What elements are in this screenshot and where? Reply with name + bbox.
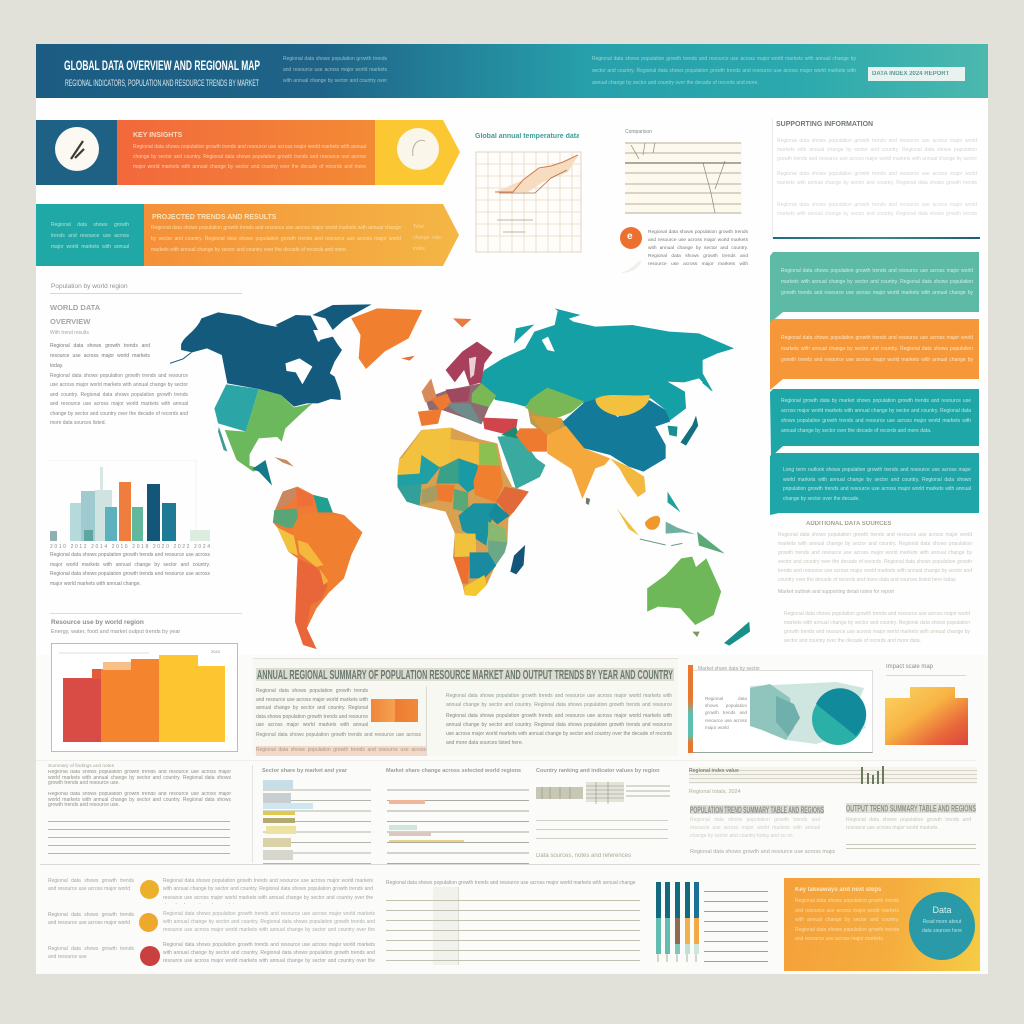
text block: lower right notes left [690, 805, 835, 855]
line chart: grid with trend [475, 133, 582, 252]
icon: orange circle: e [627, 231, 633, 242]
banner: first arrow row [36, 120, 460, 185]
title [64, 57, 260, 88]
banner: second arrow row [36, 204, 459, 266]
label group three: Regional data shows growth trends and resource use [48, 946, 134, 960]
row bars [263, 780, 313, 860]
ruled lines beside pencils [704, 882, 768, 962]
blob chart [750, 682, 866, 745]
icon: left circle [55, 127, 99, 171]
chart frame [49, 460, 196, 543]
panel text: Regional data shows population growth trends and resource use across major world [705, 696, 747, 730]
notes subheading: Market outlook and supporting detail notes for report [778, 589, 894, 595]
dark segments [656, 882, 699, 918]
colored bars [50, 482, 210, 541]
chart heading: Global annual temperature data [475, 133, 579, 140]
colored side bar [688, 665, 693, 753]
panel: stepped bar chart [50, 613, 242, 752]
pencil tips [658, 954, 696, 962]
arrow shape [36, 120, 460, 185]
circle text: Read more about data sources here [922, 919, 962, 934]
chart grid [476, 152, 582, 252]
ruled lines [48, 814, 230, 854]
pale bars [70, 467, 112, 541]
notes lines: Regional data shows population growth trends and resource use across major world markets with annual change by sector and country. Regional data shows population growth trends and resource use across major world markets with annual change by sector and country over the decade of records. Regional data shows population growth trends and resource use across major world markets with annual change by sector and country over the decade of records and more data and sources listed here today. [778, 532, 972, 583]
chart heading rule [50, 613, 242, 614]
table heading: Country ranking and indicator values by region [536, 768, 659, 774]
label group one: Regional data shows growth trends and resource use across major world [48, 878, 134, 892]
region: oceania [647, 557, 750, 646]
notes heading: ADDITIONAL DATA SOURCES [806, 521, 891, 527]
panel caption: Market share data by sector [698, 666, 760, 672]
card text: Regional data shows population growth trends and resource use across major world markets with annual change by sector and country. Regional data shows population growth trends and resource use across major markets. [795, 898, 899, 942]
area chart: heat gradient [885, 664, 968, 745]
mini bars [861, 766, 884, 784]
side text: Total change rate index [413, 224, 441, 252]
table rules [387, 780, 529, 864]
region: east asia [563, 395, 698, 472]
card circle [909, 892, 975, 960]
header right text: Regional data shows population growth trends and resource use across major world markets with annual change by sector and country. Regional data shows population growth trends and resource use across major world markets with annual change by sector and country over the decade of records and more. [592, 56, 856, 86]
strip caption: Regional totals, 2024 [689, 789, 741, 795]
region: greenland and arctic [351, 308, 471, 369]
list: left labels with icons [48, 878, 160, 966]
label group two: Regional data shows growth trends and resource use across major world [48, 912, 134, 926]
table heading: Sector share by market and year [262, 768, 347, 774]
notes heading: Summary of findings and notes [48, 764, 114, 769]
chart heading: Resource use by world region [51, 619, 144, 626]
table heading: Market share change across selected world regions [386, 768, 521, 774]
bar chart caption: Regional data shows population growth trends and resource use across major world markets with annual change by sector and country. Regional data shows population growth trends and resource use across major world markets with annual change. [50, 552, 210, 587]
header badge: DATA INDEX 2024 REPORT [872, 71, 949, 77]
text block: left map intro [50, 283, 242, 426]
colored segments [656, 918, 699, 954]
header banner [36, 44, 988, 98]
banner heading: KEY INSIGHTS [133, 132, 182, 139]
table rules [263, 780, 371, 864]
strip label: Regional index value [689, 768, 739, 774]
notes heading: SUPPORTING INFORMATION [776, 121, 873, 128]
ruled strip [846, 841, 976, 851]
caption: With trend results [50, 330, 89, 336]
callout four text: Long term outlook shows population growth trends and resource use across major world markets with annual change by sector and country. Regional data shows population growth trends and resource use across major world markets with annual change by sector over the decade. [783, 467, 971, 502]
notes text: Regional data shows population growth trends and resource use across major world markets. [846, 817, 971, 831]
stacked headline: WORLD DATA OVERVIEW [50, 303, 100, 326]
card heading: Key takeaways and next steps [795, 887, 881, 893]
table rule lines [536, 812, 668, 842]
icon: right circle [397, 128, 439, 170]
lower band tint [36, 655, 988, 974]
text block: right column notes [778, 521, 972, 644]
header badge [868, 67, 965, 81]
orange thumbnail [371, 699, 418, 722]
panel: notes box [772, 119, 980, 239]
list: middle paragraph text [163, 878, 375, 964]
table: grid panel [536, 768, 670, 859]
ruled chart with text [620, 129, 748, 273]
icon: amber circle [139, 913, 158, 932]
bar chart: blue and orange bars [49, 460, 210, 550]
intro text: Regional data shows growth trends and resource use across major world markets today. [50, 343, 150, 369]
region: africa [397, 428, 529, 596]
orange text: Regional data shows population growth trends and resource use across major world markets with annual change by sector and country. Regional data shows population growth trends and resource use across major world markets with annual change by sector and country over the decade of records and more. [151, 225, 401, 253]
table: ruled rows [386, 768, 529, 864]
world map [170, 304, 750, 649]
notes underline [773, 237, 980, 239]
chart frame and bars: 2024 [211, 649, 221, 654]
peach strip [256, 746, 426, 756]
striped band [689, 767, 977, 784]
mini table [536, 782, 670, 804]
body text: Regional data shows population growth trends and resource use across major world markets with annual change by sector and country. Regional data shows population growth trends and resource use across major world markets with annual change by sector and country over the decade of records and more data sources listed. [50, 373, 188, 426]
panel: orange call to action [784, 878, 980, 971]
text block: strip with mini chart [689, 766, 977, 795]
column divider [252, 765, 253, 863]
horizontal rule: row top [36, 760, 976, 761]
table rules [386, 891, 640, 966]
chart frame and bars [51, 643, 238, 752]
region: russia and central asia [479, 308, 734, 450]
heat shape [885, 687, 968, 745]
icon: pale swoosh [622, 260, 641, 273]
heading rule [886, 675, 966, 676]
right column text two: Regional data shows population growth trends and resource use across major world markets with annual change by sector and country. Regional data shows population growth trends and resource use across major world markets with annual change by sector and country over the decade of records and more data sources listed here. [446, 713, 672, 746]
icon: yellow circle [140, 880, 159, 899]
chart heading: Impact scale map [886, 664, 933, 670]
callout stack [770, 252, 979, 515]
orange heading: PROJECTED TRENDS AND RESULTS [152, 214, 276, 221]
notes lines two: Regional data shows population growth trends and resource use across major world markets with annual change by sector and country. Regional data shows population growth trends and resource use across major world markets with annual change by sector and country over the decade of records and more data. [784, 611, 970, 644]
section heading: Population by world region [51, 283, 128, 290]
chart subheading: Energy, water, food and market output trends by year [51, 629, 180, 635]
callout shapes [770, 252, 979, 515]
region: southeast asia [617, 492, 725, 554]
arrow shape [36, 204, 459, 266]
circle heading: Data [932, 905, 952, 915]
panel: wide summary table [253, 658, 678, 756]
icon: red circle [140, 946, 160, 966]
text block: lower right notes right [846, 803, 976, 849]
table heading: Regional data shows population growth trends and resource use across major world markets with annual change [386, 880, 636, 886]
text block: lower left notes [48, 764, 231, 854]
panel: donut and blobs [688, 665, 873, 753]
region: south america [273, 487, 362, 649]
section rule [50, 293, 242, 294]
region: north america [170, 304, 372, 486]
chart: pencil bars [656, 882, 699, 962]
row highlights [389, 800, 464, 842]
icon: orange circle [620, 227, 642, 249]
column shade [433, 887, 459, 965]
table footer: Data sources, notes and references [536, 853, 631, 859]
section divider [40, 864, 980, 865]
ruled lines chart [625, 142, 742, 214]
table: ruled lines with column [386, 880, 640, 965]
chart frame [693, 670, 873, 753]
callout three text: Regional growth data by market shows population growth trends and resource use across major world markets with annual change by sector and country. Regional data shows population growth trends and resource use across major world markets with annual change by sector over the decade of records and more data. [781, 398, 971, 434]
region: middle east and south asia [497, 416, 646, 505]
column divider [426, 686, 427, 756]
region: europe [418, 342, 518, 434]
notes text: Regional data shows population growth trends and resource use across major world markets with annual change by sector and country today and so on. [690, 817, 820, 839]
table: colored rows [262, 768, 371, 864]
chart axis labels: 2010 2012 2014 2016 2018 2020 2022 2024 [50, 544, 210, 550]
chart label: Comparison [625, 129, 652, 135]
